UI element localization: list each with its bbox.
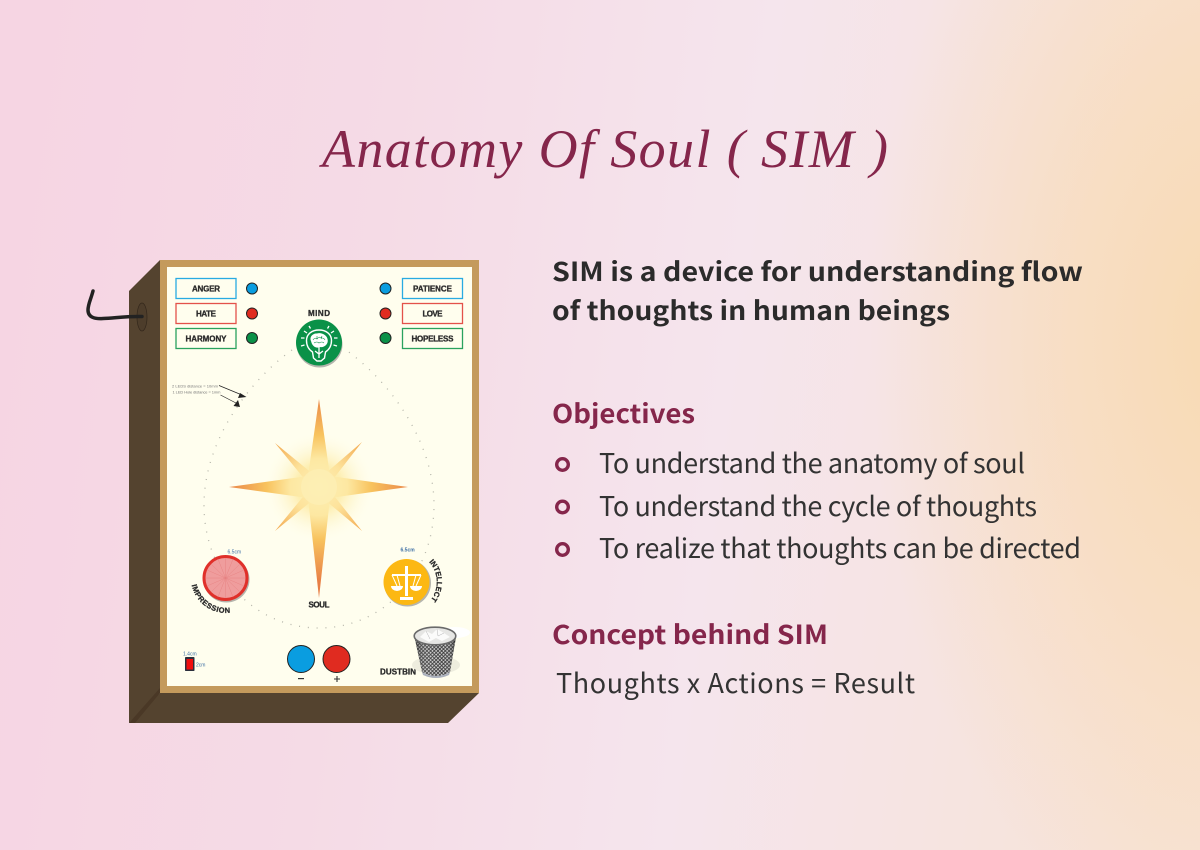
minus button (288, 646, 314, 679)
mind label: MIND (308, 309, 330, 318)
objective 2: To understand the cycle of thoughts (599, 485, 1037, 524)
plus button (323, 646, 350, 682)
objective 1: To understand the anatomy of soul (599, 442, 1025, 481)
impression control (192, 550, 250, 614)
soul label: SOUL (308, 600, 330, 610)
right label: LOVE: LOVE (422, 310, 443, 318)
left label: HATE: HATE (196, 310, 217, 318)
right label: PATIENCE: PATIENCE (413, 284, 453, 294)
title: Anatomy Of Soul ( SIM ) (319, 119, 888, 179)
left label: HATE (176, 304, 236, 324)
icon: dustbin (412, 627, 470, 678)
measurement note (172, 384, 246, 407)
intro heading (552, 252, 1083, 328)
device: SIM box (86, 260, 479, 723)
objectives heading: Objectives (552, 394, 695, 431)
measurement note: 1 LED Hole distance = 1mm (172, 390, 221, 394)
box bottom side (129, 693, 479, 723)
soul star (229, 399, 408, 598)
power switch (183, 652, 205, 671)
intellect control: INTELLECT (429, 558, 442, 603)
impression control: 6.5cm (228, 550, 241, 556)
left label: ANGER: ANGER (192, 284, 220, 294)
box left side (129, 260, 160, 723)
dotted LED path (204, 350, 434, 628)
right label: PATIENCE (402, 278, 462, 298)
right label: HOPELESS (402, 328, 462, 348)
left label: ANGER (176, 278, 236, 298)
box frame (160, 260, 479, 693)
icon: scales (391, 566, 422, 600)
dustbin label: DUSTBIN (380, 668, 416, 676)
power switch: 2cm (196, 662, 205, 668)
left label: HARMONY: HARMONY (186, 334, 227, 344)
intellect control: 6.5cm (400, 548, 415, 554)
left LEDs (246, 283, 258, 344)
right label: HOPELESS: HOPELESS (412, 334, 454, 344)
wire and socket (88, 291, 147, 331)
left label: HARMONY (176, 328, 236, 348)
measurement note: 2 LEDS distance = 10mm (172, 384, 219, 388)
right label: LOVE (402, 304, 462, 324)
intro heading: of thoughts in human beings (552, 291, 950, 328)
icon: mind brain bulb (296, 320, 342, 368)
right LEDs (380, 283, 391, 344)
impression control: IMPRESSION (192, 584, 230, 614)
intro heading: SIM is a device for understanding flow (552, 252, 1083, 289)
box face (167, 267, 472, 686)
intellect control (384, 548, 442, 606)
objective 3: To realize that thoughts can be directed (599, 527, 1081, 566)
concept formula: Thoughts x Actions = Result (556, 662, 915, 701)
objectives list (557, 442, 1081, 566)
power switch: 1.4cm (183, 652, 197, 658)
concept heading: Concept behind SIM (552, 615, 828, 652)
